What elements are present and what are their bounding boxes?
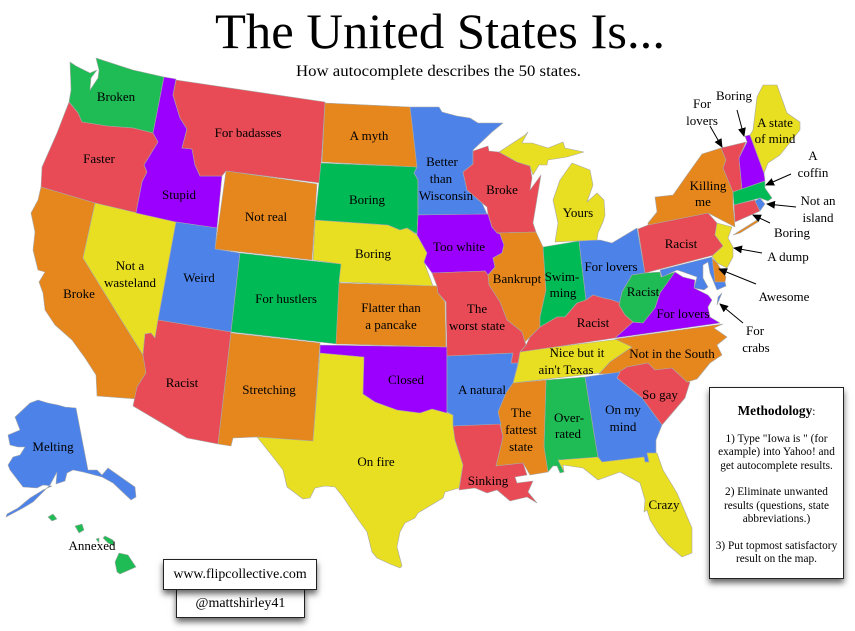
- panel: methodology: abbreviations.): [743, 513, 810, 525]
- state: Idaho: [136, 77, 222, 228]
- state labels: wasteland: [104, 275, 156, 290]
- arrow: New Jersey: [734, 248, 762, 253]
- state labels: For badasses: [215, 125, 281, 140]
- state: Utah: [158, 222, 240, 332]
- state: North Dakota: [322, 103, 417, 167]
- state: New York: [648, 148, 735, 227]
- state: New Jersey: [712, 223, 733, 268]
- state: Minnesota: [410, 107, 503, 215]
- panel: methodology: result on the map.: [736, 553, 817, 565]
- state labels: The: [467, 301, 487, 316]
- state labels: A state: [757, 115, 793, 130]
- state: Kentucky: [520, 295, 633, 352]
- state labels: a pancake: [365, 317, 417, 332]
- state: New Hampshire: [739, 135, 765, 189]
- panel: methodology: 1) Type "Iowa is " (for: [725, 433, 828, 445]
- state: Indiana: [540, 241, 586, 327]
- arrow: Rhode Island: [767, 204, 796, 207]
- state labels: Over-: [554, 410, 584, 425]
- panel: methodology: results (questions, state: [724, 500, 829, 512]
- state labels: Not an: [800, 193, 836, 208]
- panel: methodology: get autocomplete results.: [720, 460, 833, 472]
- state: Wyoming: [215, 171, 317, 260]
- state labels: For hustlers: [255, 291, 317, 306]
- state labels: Not a: [116, 258, 144, 273]
- state labels: Killing: [690, 178, 727, 193]
- state: California: [31, 187, 146, 399]
- state labels: Racist: [577, 315, 610, 330]
- state: Illinois: [488, 232, 546, 342]
- state: Tennessee: [513, 339, 632, 383]
- state: Iowa: [417, 214, 504, 275]
- state: Vermont: [721, 142, 746, 192]
- state: Alabama: [544, 377, 598, 473]
- state labels: A dump: [767, 249, 809, 264]
- state: Massachusetts: [733, 181, 772, 205]
- state labels: For: [746, 323, 765, 338]
- state: Virginia: [615, 272, 720, 338]
- state labels: For: [693, 96, 712, 111]
- state labels: Better: [426, 154, 459, 169]
- state labels: Boring: [355, 246, 392, 261]
- state labels: Crazy: [648, 497, 680, 512]
- panel: methodology: Methodology:: [738, 403, 815, 418]
- state: Maryland: [660, 257, 726, 290]
- state labels: Boring: [774, 225, 811, 240]
- state: Colorado: [231, 253, 341, 344]
- state: South Dakota: [315, 163, 418, 234]
- state: North Carolina: [599, 324, 727, 382]
- state labels: of mind: [755, 131, 796, 146]
- panel: methodology: 3) Put topmost satisfactory: [716, 540, 837, 552]
- state labels: Closed: [388, 372, 425, 387]
- state labels: Too white: [433, 239, 485, 254]
- state labels: Boring: [716, 88, 753, 103]
- state: Louisiana: [453, 424, 537, 503]
- state labels: Racist: [166, 375, 199, 390]
- arrow: Connecticut: [753, 215, 770, 223]
- state: Hawaii: [48, 514, 136, 574]
- credit box: website: www.flipcollective.com: [173, 567, 307, 582]
- state labels: than: [430, 171, 453, 186]
- state labels: So gay: [642, 387, 678, 402]
- state labels: Swim-: [545, 269, 579, 284]
- state labels: crabs: [742, 340, 770, 355]
- state: Connecticut: [734, 200, 760, 222]
- state labels: A natural: [458, 382, 506, 397]
- state: Montana: [173, 80, 325, 183]
- state: Arizona: [133, 320, 231, 444]
- state labels: coffin: [798, 165, 829, 180]
- state shapes: [6, 58, 800, 574]
- credit box: twitter handle: [176, 588, 305, 618]
- state labels: Broken: [97, 89, 136, 104]
- state labels: Bankrupt: [493, 271, 542, 286]
- state: South Carolina: [617, 363, 690, 425]
- state labels: Nice but it: [550, 345, 605, 360]
- state: Oklahoma: [320, 345, 447, 413]
- state labels: Not in the South: [629, 346, 715, 361]
- title: The United States Is...: [215, 3, 665, 59]
- state labels: Sinking: [468, 473, 509, 488]
- state: Pennsylvania: [638, 213, 723, 273]
- state: Georgia: [585, 372, 662, 462]
- state labels: Annexed: [69, 538, 116, 553]
- panel: methodology: example) into Yahoo! and: [718, 446, 835, 458]
- state labels: Not real: [245, 209, 288, 224]
- state labels: Yours: [563, 205, 593, 220]
- state: Long Island: [733, 220, 758, 235]
- state: Nebraska: [313, 220, 433, 286]
- state labels: Racist: [627, 284, 660, 299]
- state labels: island: [802, 210, 834, 225]
- arrow: Massachusetts: [766, 174, 791, 185]
- state labels: Broke: [63, 286, 95, 301]
- state labels: worst state: [449, 318, 505, 333]
- credit box: website: [163, 559, 317, 590]
- state labels: Broke: [486, 182, 518, 197]
- state: Florida: [558, 453, 692, 557]
- arrow: Maryland: [720, 304, 743, 323]
- state: Arkansas: [447, 353, 518, 426]
- state labels: A myth: [350, 128, 389, 143]
- callout arrows: [710, 110, 796, 323]
- subtitle: How autocomplete describes the 50 states.: [296, 63, 581, 80]
- state labels: Stretching: [242, 382, 296, 397]
- panel: methodology: 2) Eliminate unwanted: [725, 486, 828, 498]
- state labels: Melting: [32, 439, 74, 454]
- state: Virginia eastern shore: [717, 293, 722, 305]
- state labels: fattest: [505, 422, 537, 437]
- state: Michigan upper peninsula: [499, 132, 584, 175]
- state labels: On fire: [357, 454, 395, 469]
- state: West Virginia: [619, 272, 675, 323]
- state: Missouri: [432, 271, 526, 363]
- arrow: New Hampshire: [737, 110, 744, 136]
- state labels: For lovers: [584, 259, 638, 274]
- state: Oregon: [41, 102, 158, 213]
- arrow: Delaware: [719, 269, 756, 284]
- state: Ohio: [579, 228, 645, 303]
- state labels: mind: [610, 419, 637, 434]
- state: Rhode Island: [755, 198, 765, 211]
- state labels: A: [808, 148, 818, 163]
- state: Kansas: [336, 283, 446, 347]
- state labels: [32, 88, 836, 553]
- state labels: Weird: [183, 270, 215, 285]
- state labels: Wisconsin: [419, 188, 474, 203]
- state labels: Stupid: [162, 187, 196, 202]
- state: Texas: [257, 353, 463, 568]
- state: Alaska: [6, 400, 136, 517]
- state: Delaware: [711, 257, 726, 282]
- arrow: Vermont: [710, 126, 722, 147]
- state labels: Awesome: [759, 289, 810, 304]
- state labels: me: [695, 194, 711, 209]
- state: New Mexico: [218, 333, 320, 446]
- state: Washington: [69, 58, 164, 133]
- state: Wisconsin: [463, 146, 541, 233]
- state labels: lovers: [686, 113, 718, 128]
- state labels: For lovers: [656, 306, 710, 321]
- state: Michigan lower peninsula: [553, 163, 605, 242]
- state labels: rated: [555, 426, 581, 441]
- state labels: Flatter than: [361, 300, 421, 315]
- credit box: twitter handle: @mattshirley41: [196, 596, 285, 611]
- state: Maine: [750, 85, 800, 173]
- state: Mississippi: [496, 380, 548, 475]
- state labels: Racist: [665, 236, 698, 251]
- state labels: On my: [605, 402, 641, 417]
- state labels: The: [511, 405, 531, 420]
- state labels: Faster: [83, 151, 116, 166]
- state labels: Boring: [349, 192, 386, 207]
- state labels: state: [509, 439, 533, 454]
- panel: methodology: [709, 387, 844, 579]
- state: Nevada: [83, 203, 176, 355]
- state labels: ming: [550, 285, 577, 300]
- state labels: ain't Texas: [539, 362, 593, 377]
